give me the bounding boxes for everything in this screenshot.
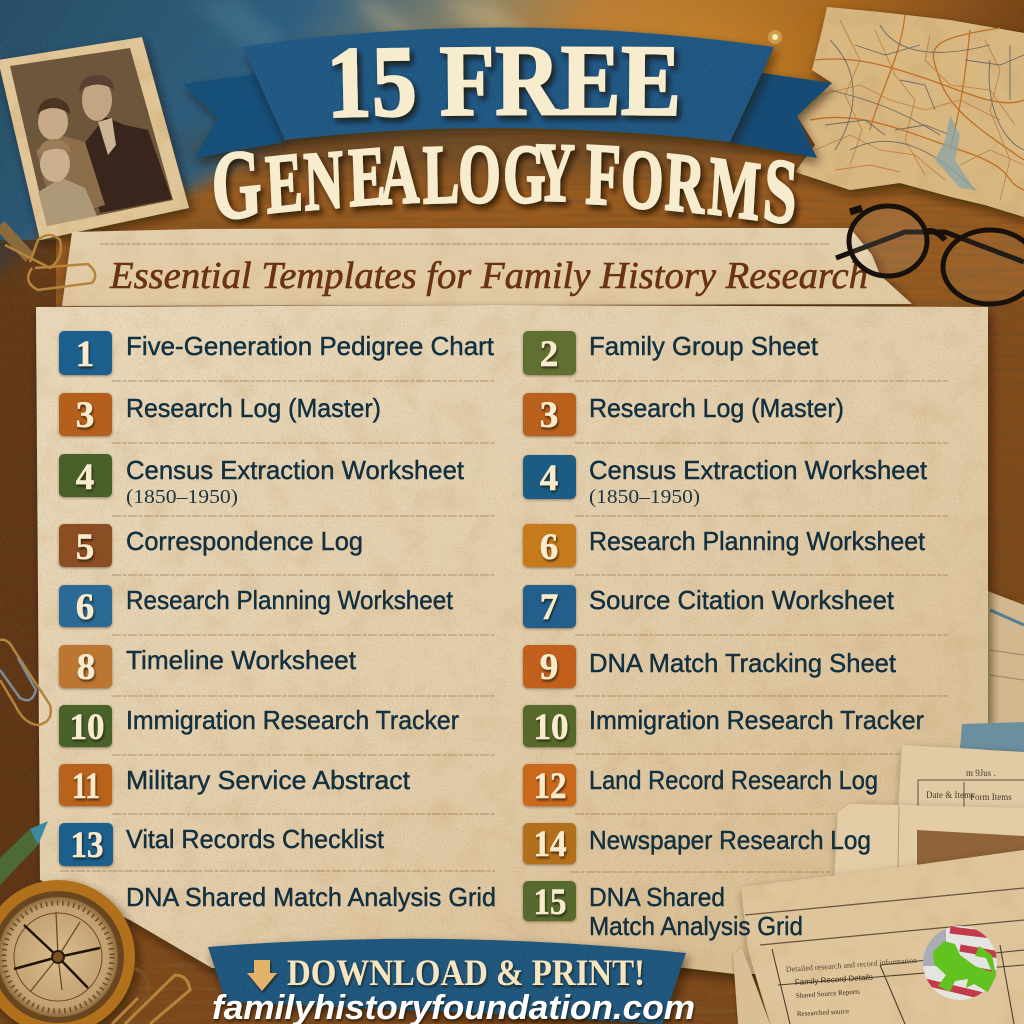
right item 15 bbox=[523, 881, 803, 941]
right item 14 bbox=[523, 823, 871, 865]
title line 2: E bbox=[347, 130, 387, 225]
left item 11: 11 bbox=[72, 766, 100, 807]
right item 9: DNA Match Tracking Sheet bbox=[589, 648, 897, 678]
left item 13 bbox=[59, 823, 385, 866]
left item 8: Timeline Worksheet bbox=[126, 645, 357, 675]
right item 3: 3 bbox=[540, 395, 558, 436]
right item 6 bbox=[523, 524, 926, 568]
right item 10: 10 bbox=[534, 707, 568, 748]
title line 2: S bbox=[760, 138, 800, 244]
document stack: front record sheet: Family Record Details bbox=[795, 973, 873, 987]
blue paper scrap bbox=[960, 722, 1024, 752]
right ribbon tail bbox=[728, 73, 832, 158]
left item 6: 6 bbox=[76, 587, 94, 628]
left item 10: Immigration Research Tracker bbox=[126, 705, 459, 735]
title line 2: L bbox=[422, 129, 460, 222]
left item 8 bbox=[59, 645, 357, 688]
title line 2: M bbox=[706, 140, 763, 239]
left item 8: 8 bbox=[77, 647, 95, 688]
subtitle strip bbox=[62, 228, 912, 306]
left item 11: Military Service Abstract bbox=[126, 765, 411, 795]
right item 3 bbox=[523, 393, 844, 436]
right item 15: 15 bbox=[534, 882, 566, 923]
title line 2: F bbox=[585, 126, 622, 225]
subtitle: Essential Templates for Family History Research bbox=[109, 255, 868, 297]
document stack: front record sheet bbox=[741, 850, 1024, 1024]
right item 9 bbox=[523, 645, 897, 688]
title line 2: R bbox=[663, 136, 708, 232]
icon: paper clips top left bbox=[0, 225, 95, 290]
title line 2: Y bbox=[535, 126, 575, 220]
title banner bbox=[183, 28, 832, 158]
right item 4: (1850–1950) bbox=[589, 486, 700, 508]
left item DNA grid: DNA Shared Match Analysis Grid bbox=[126, 882, 496, 912]
map bbox=[795, 7, 1024, 217]
icon: lion logo badge bbox=[920, 926, 1000, 1000]
right item 12: 12 bbox=[534, 766, 566, 807]
right item 7 bbox=[523, 585, 895, 628]
left item 5: Correspondence Log bbox=[126, 526, 363, 556]
right item 10 bbox=[523, 705, 924, 748]
left item 10: 10 bbox=[70, 707, 104, 748]
title line 2: O bbox=[619, 133, 665, 228]
icon: glasses bbox=[836, 206, 1024, 304]
left item 10 bbox=[59, 705, 459, 748]
photo of family bbox=[0, 37, 189, 240]
main ribbon bbox=[243, 28, 774, 142]
right item 2: 2 bbox=[540, 334, 558, 375]
document stack: photo folder bbox=[834, 804, 1024, 880]
document stack: front record sheet: Researched source bbox=[797, 1007, 849, 1018]
right item 4 bbox=[523, 455, 928, 508]
right item 14: 14 bbox=[534, 824, 566, 865]
back edge sheet bbox=[733, 948, 770, 1024]
left item 3 bbox=[59, 393, 381, 436]
document stack: front record sheet: Detailed research and record information bbox=[786, 956, 917, 974]
title line 2: E bbox=[264, 136, 304, 232]
left item 1: Five-Generation Pedigree Chart bbox=[126, 331, 495, 361]
child bbox=[38, 178, 97, 226]
icon: paper clip left edge bbox=[0, 640, 51, 725]
left item 6 bbox=[59, 585, 454, 628]
document stack: table form: m 9Jus . bbox=[966, 768, 996, 778]
right item 15: DNA Shared bbox=[589, 882, 725, 912]
left item 1 bbox=[59, 331, 495, 375]
stacked papers behind panel bbox=[985, 590, 1024, 740]
left item 3: Research Log (Master) bbox=[126, 393, 381, 423]
right item 3: Research Log (Master) bbox=[589, 393, 844, 423]
download label: DOWNLOAD & PRINT! bbox=[287, 953, 645, 994]
left item 6: Research Planning Worksheet bbox=[126, 585, 454, 615]
left item 3: 3 bbox=[76, 395, 94, 436]
left item 4: 4 bbox=[76, 457, 94, 498]
left item 4: Census Extraction Worksheet bbox=[126, 455, 465, 485]
right item 2: Family Group Sheet bbox=[589, 331, 819, 361]
icon: compass bbox=[0, 880, 135, 1024]
panel: forms list bbox=[36, 305, 988, 974]
right item 12: Land Record Research Log bbox=[589, 765, 878, 795]
document stack: table form: Date & Items bbox=[926, 790, 975, 800]
left ribbon tail bbox=[183, 74, 285, 158]
right item 6: Research Planning Worksheet bbox=[589, 526, 926, 556]
title line 2: N bbox=[302, 133, 345, 229]
left item 1: 1 bbox=[76, 334, 94, 375]
right item 15: Match Analysis Grid bbox=[589, 911, 803, 941]
man in suit bbox=[83, 117, 172, 213]
document stack: table form: Form Items bbox=[970, 792, 1012, 802]
bottom banner bbox=[208, 939, 686, 1024]
right item 4: 4 bbox=[540, 458, 558, 499]
right item 2 bbox=[523, 331, 819, 375]
left item 5: 5 bbox=[76, 527, 94, 568]
icon: download arrow bbox=[247, 960, 277, 991]
title line 1: 15 FREE bbox=[332, 46, 684, 126]
title line 2: G bbox=[503, 128, 546, 221]
title line 2: O bbox=[458, 128, 501, 221]
document stack: front record sheet: Shared Source Reports bbox=[796, 988, 860, 1000]
row dividers bbox=[60, 381, 948, 872]
right item 4: Census Extraction Worksheet bbox=[589, 455, 928, 485]
right item 7: Source Citation Worksheet bbox=[589, 585, 895, 615]
icon: paper clips bottom bbox=[112, 968, 190, 1024]
right item 6: 6 bbox=[540, 527, 558, 568]
left item 4 bbox=[59, 454, 465, 508]
title line 2: A bbox=[379, 128, 420, 223]
woman bbox=[36, 135, 105, 220]
icon: pencil bbox=[0, 821, 48, 885]
right item 7: 7 bbox=[540, 587, 558, 628]
left item 4: (1850–1950) bbox=[126, 486, 238, 508]
left item 13: 13 bbox=[70, 825, 104, 866]
right item 14: Newspaper Research Log bbox=[589, 825, 871, 855]
right item 12 bbox=[523, 764, 878, 807]
left item 5 bbox=[59, 524, 363, 568]
left item 13: Vital Records Checklist bbox=[126, 824, 385, 854]
left item 11 bbox=[59, 764, 411, 807]
right item 9: 9 bbox=[540, 647, 558, 688]
title line 2: G bbox=[209, 127, 264, 241]
title line 2 bbox=[209, 126, 800, 244]
right item 10: Immigration Research Tracker bbox=[589, 705, 924, 735]
document stack: table form bbox=[898, 745, 1024, 820]
